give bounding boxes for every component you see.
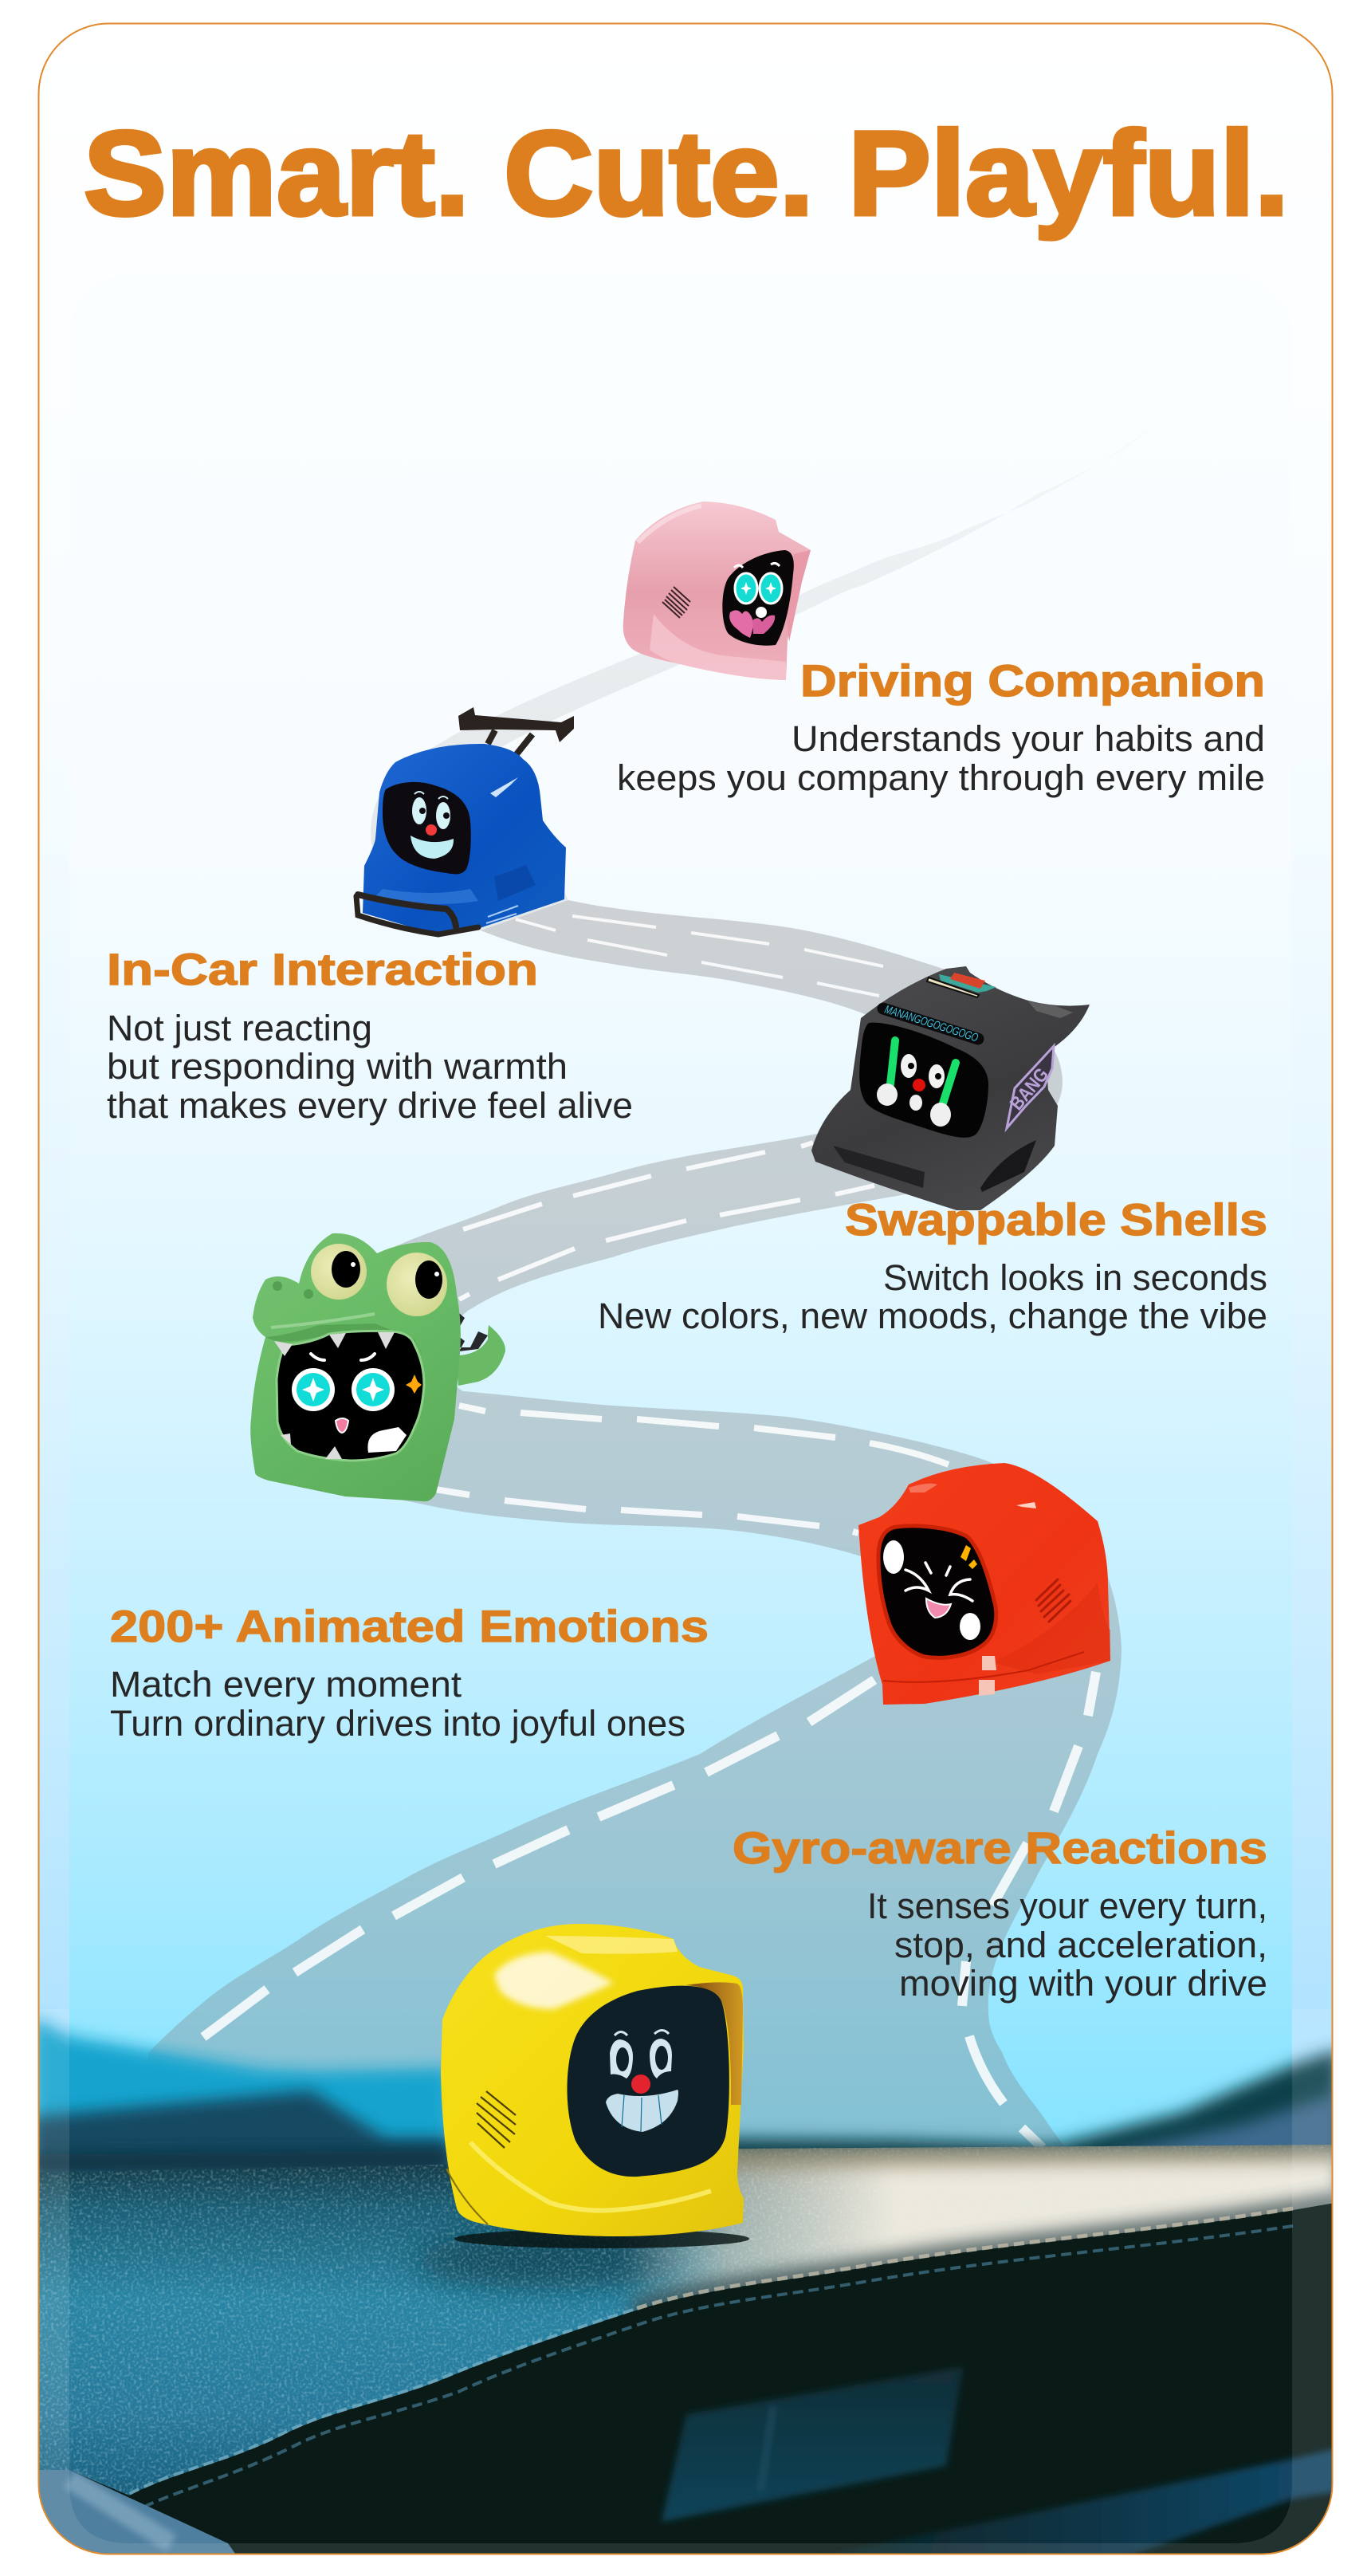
blurred windshield right (738, 2039, 1331, 2149)
croc snout shading (265, 1281, 422, 1355)
pink face (729, 563, 782, 638)
croc teeth (274, 1332, 395, 1459)
road: far section (371, 425, 1154, 930)
red side shading (992, 1583, 1110, 1674)
robot: blue (356, 707, 574, 934)
dark shading along seam (633, 2202, 1339, 2311)
stitching seam (129, 2208, 1293, 2506)
title: Smart. Cute. Playful. (84, 106, 1289, 240)
blue screen (383, 782, 471, 874)
yellow helmet shine (494, 1952, 614, 2009)
dark lower dashboard (129, 2204, 1331, 2495)
text block: In-Car Interaction: Not just reacting (107, 1008, 372, 1048)
text block: Driving Companion: keeps you company through every mile (617, 757, 1265, 798)
robot: pink (623, 501, 811, 680)
robot: black racing shell (811, 966, 1090, 1210)
blue bumper (356, 895, 478, 934)
text block: 200+ Animated Emotions (110, 1601, 709, 1744)
yellow face (606, 2030, 678, 2132)
text block: Swappable Shells: Switch looks in seconds (883, 1257, 1267, 1298)
blurred windshield left (32, 2017, 450, 2181)
text block: Gyro-aware Reactions: moving with your drive (899, 1963, 1267, 2004)
pink screen (722, 550, 794, 646)
yellow speaker grille (477, 2091, 516, 2148)
yellow ridge highlight (470, 2142, 711, 2211)
blue highlight (490, 777, 518, 797)
text block: In-Car Interaction (107, 944, 633, 1126)
red screen (878, 1526, 996, 1658)
text block: Driving Companion (617, 655, 1265, 798)
yellow inner rim (686, 1982, 743, 2105)
sticker: name strip (883, 1004, 980, 1045)
text block: Gyro-aware Reactions: stop, and acceleration, (894, 1925, 1267, 1965)
blue face (411, 792, 454, 859)
text block: Swappable Shells (598, 1194, 1267, 1336)
red speaker grille (1036, 1579, 1070, 1622)
sticker: BANG (1006, 1046, 1054, 1128)
front grille (833, 1146, 925, 1188)
text block: Gyro-aware Reactions: Gyro-aware Reactions (733, 1823, 1267, 1873)
text block: 200+ Animated Emotions: Match every moment (110, 1664, 462, 1705)
text block: Gyro-aware Reactions (733, 1823, 1267, 2004)
croc mouth screen (277, 1331, 424, 1461)
contact shadow (454, 2229, 749, 2248)
text block: In-Car Interaction: In-Car Interaction (107, 944, 538, 994)
robot: yellow hero on dashboard (441, 1924, 749, 2248)
robot shadow on leather (414, 2232, 686, 2289)
cream highlight (627, 2145, 1331, 2311)
black shell screen (859, 1023, 988, 1138)
faint badge on dashboard (662, 2367, 963, 2522)
text block: Driving Companion: Driving Companion (800, 655, 1265, 706)
blue spoiler (458, 707, 574, 754)
text block: Driving Companion: Understands your habits and (792, 718, 1265, 759)
lower right reflection (840, 2446, 1331, 2553)
text block: Gyro-aware Reactions: It senses your every turn, (867, 1886, 1267, 1926)
black shell face (877, 1040, 956, 1127)
yellow screen (568, 1986, 729, 2177)
red gloss stripe (979, 1656, 996, 1696)
sticker: BANG: BANG (1006, 1064, 1053, 1115)
dark base of dashboard (69, 2312, 631, 2505)
pink speaker grille (662, 587, 690, 618)
sticker: name strip: MANANGOGOGOGOGO (883, 1004, 980, 1045)
amber top line (701, 2141, 1339, 2170)
text block: In-Car Interaction: but responding with warmth (107, 1046, 568, 1087)
croc tail and spikes (454, 1309, 505, 1386)
croc screen face (292, 1354, 422, 1453)
robot: green crocodile (250, 1233, 505, 1501)
text block: Swappable Shells: New colors, new moods, change the vibe (598, 1296, 1267, 1336)
road lane dashes (203, 916, 1096, 2148)
dashboard photo (32, 2009, 1339, 2567)
croc eyes (311, 1244, 447, 1316)
pink front rim (650, 614, 786, 680)
sticker: GT badge (927, 973, 996, 997)
text block: 200+ Animated Emotions: 200+ Animated Emotions (110, 1601, 709, 1651)
red screen face (883, 1540, 980, 1640)
leather dashboard top (32, 2141, 1339, 2503)
text block: Swappable Shells: Swappable Shells (845, 1194, 1267, 1245)
robot: red (858, 1463, 1110, 1705)
road: winding main section (148, 900, 1122, 2169)
outer edge veil (32, 2009, 1339, 2559)
text block: In-Car Interaction: that makes every drive feel alive (107, 1085, 633, 1126)
sky panel (69, 274, 1292, 2543)
text block: 200+ Animated Emotions: Turn ordinary drives into joyful ones (110, 1703, 686, 1744)
corner trim (40, 2470, 235, 2553)
